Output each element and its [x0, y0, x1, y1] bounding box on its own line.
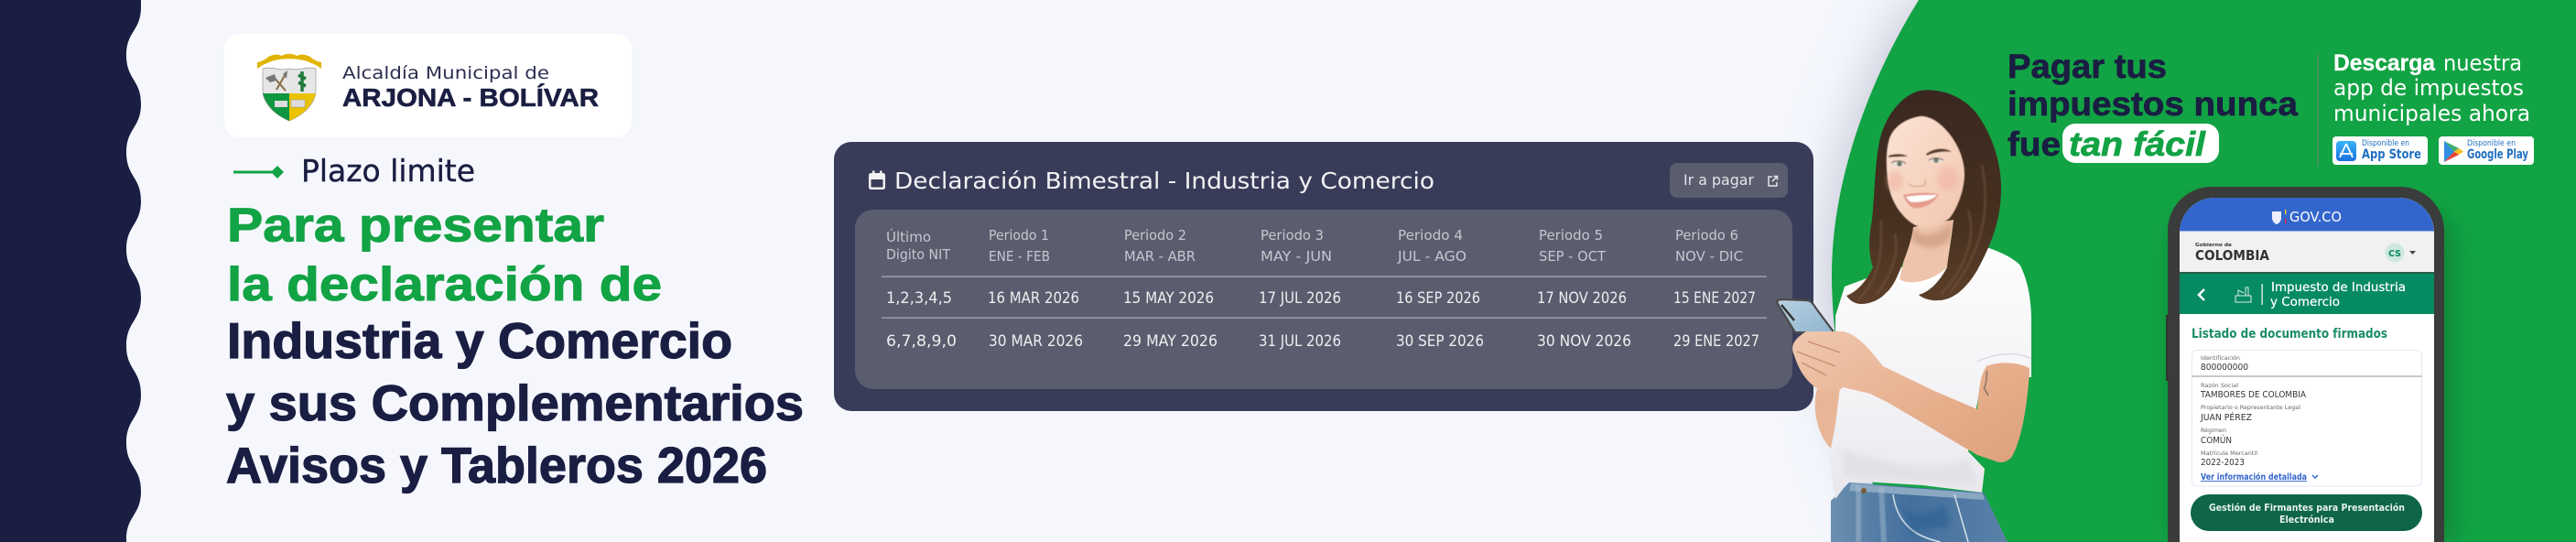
woman: hair — [1846, 90, 2001, 304]
table row 2: 6,7,8,9,0 — [886, 332, 957, 351]
phone data card: Razón Social — [2201, 382, 2238, 389]
phone title bar: impuesto de industria: Impuesto de Industria — [2271, 281, 2406, 295]
table row 2: 30 MAR 2026 — [989, 332, 1083, 351]
table row 1: 15 ENE 2027 — [1673, 289, 1756, 308]
phone title bar: impuesto de industria: y Comercio — [2270, 296, 2340, 309]
phone button: Gestión de Firmantes para Presentación — [2209, 502, 2405, 514]
table row 1: 16 SEP 2026 — [1396, 289, 1480, 308]
badge: google play — [2439, 136, 2534, 165]
icon: coat of arms shield — [257, 54, 321, 121]
download text: municipales ahora — [2333, 101, 2530, 126]
table row 1: 15 MAY 2026 — [1123, 289, 1214, 308]
phone subheader: gobierno de colombia — [2180, 232, 2434, 272]
logo card — [224, 34, 632, 137]
table header — [886, 227, 1743, 265]
woman holding a phone — [1777, 90, 2031, 542]
phone mockup — [2166, 187, 2455, 542]
download text: app de impuestos — [2333, 75, 2524, 101]
phone data card: Matrícula Mercantil — [2201, 450, 2257, 457]
table row 2: 30 SEP 2026 — [1396, 332, 1484, 351]
woman: arm and hand — [1792, 331, 2029, 462]
main headline: la declaración de — [227, 258, 662, 311]
table header: Periodo 3 — [1261, 227, 1324, 244]
badge: app store — [2332, 136, 2428, 165]
phone header: gov.co — [2180, 198, 2434, 233]
phone data card: TAMBORES DE COLOMBIA — [2200, 390, 2306, 400]
phone data card — [2192, 350, 2422, 486]
table header: SEP - OCT — [1539, 248, 1607, 265]
subheading: plazo limite: Plazo limite — [301, 153, 475, 189]
table: deadlines — [855, 210, 1792, 389]
table row 2: 29 MAY 2026 — [1123, 332, 1218, 351]
logo text: Alcaldía Municipal de — [342, 63, 549, 83]
phone data card: 2022-2023 — [2201, 458, 2245, 468]
woman: hair highlights — [1858, 165, 1986, 300]
table row 1: 16 MAR 2026 — [988, 289, 1079, 308]
green right background — [1832, 0, 2576, 542]
main headline: Para presentar — [227, 200, 604, 253]
phone data card: COMÚN — [2201, 435, 2232, 446]
slogan: pagar tus impuestos: fue — [2008, 125, 2061, 163]
table header: MAR - ABR — [1124, 248, 1196, 265]
table header: Periodo 1 — [989, 227, 1049, 244]
slogan: pagar tus impuestos: Pagar tus — [2008, 48, 2167, 85]
table header: Periodo 2 — [1124, 227, 1186, 244]
panel: declaración bimestral — [834, 142, 1813, 411]
table header: JUL - AGO — [1397, 248, 1467, 265]
table row 1: 17 NOV 2026 — [1537, 289, 1627, 308]
phone button: Electrónica — [2279, 514, 2334, 526]
table header: Último — [886, 228, 931, 245]
button: ir a pagar — [1670, 163, 1788, 198]
phone data card: Régimen — [2201, 427, 2226, 434]
woman: neck — [1900, 215, 1954, 289]
table row 1: 1,2,3,4,5 — [886, 289, 952, 308]
icon: calendar — [869, 170, 885, 190]
badge: google play: Disponible en — [2467, 139, 2516, 148]
phone header: gov.co: GOV.CO — [2289, 209, 2342, 225]
badge: app store: Disponible en — [2362, 139, 2409, 148]
woman: face — [1887, 116, 1964, 227]
table row 2 — [886, 332, 1759, 351]
table row 1 — [886, 289, 1756, 308]
woman: shirt — [1829, 247, 2031, 499]
phone data card: Propietario o Representante Legal — [2201, 404, 2300, 411]
woman: far forearm — [1815, 389, 1842, 449]
table row 2: 29 ENE 2027 — [1673, 332, 1759, 351]
main headline: y sus Complementarios — [226, 374, 804, 431]
logo text: ARJONA - BOLÍVAR — [342, 83, 599, 112]
table row 2: 31 JUL 2026 — [1259, 332, 1341, 351]
phone data card: 800000000 — [2201, 363, 2248, 373]
panel heading: Declaración Bimestral - Industria y Comercio — [894, 168, 1434, 194]
phone data card: Ver información detallada — [2201, 472, 2307, 482]
table header: ENE - FEB — [989, 248, 1050, 265]
button: ir a pagar: Ir a pagar — [1683, 171, 1754, 189]
table header: Periodo 6 — [1675, 227, 1738, 244]
phone data card: Identificación — [2201, 354, 2240, 362]
badge: google play: Google Play — [2467, 147, 2528, 162]
highlight pill: tan fácil: tan fácil — [2069, 125, 2206, 163]
slogan: pagar tus impuestos: impuestos nunca — [2008, 85, 2298, 123]
download text — [2333, 50, 2530, 126]
badge: app store: App Store — [2362, 147, 2421, 162]
phone subheader: gobierno de colombia: COLOMBIA — [2195, 247, 2269, 264]
phone button — [2191, 494, 2422, 531]
phone title bar: impuesto de industria — [2180, 272, 2434, 314]
woman: jeans — [1831, 482, 2008, 542]
table header: MAY - JUN — [1261, 248, 1332, 265]
download text: nuestra — [2443, 50, 2522, 76]
table row 1: 17 JUL 2026 — [1259, 289, 1341, 308]
main headline: Avisos y Tableros 2026 — [226, 437, 767, 493]
table header: Periodo 4 — [1398, 227, 1463, 244]
table header: Digito NIT — [886, 246, 951, 263]
wavy navy left band — [0, 0, 141, 542]
table header: NOV - DIC — [1675, 248, 1743, 265]
soft shadow of green shape — [1832, 0, 2014, 542]
slogan: pagar tus impuestos — [2008, 48, 2298, 163]
logo text — [342, 63, 599, 112]
table row 2: 30 NOV 2026 — [1537, 332, 1631, 351]
main headline: Industria y Comercio — [227, 312, 732, 369]
arrow: plazo limite — [233, 166, 284, 179]
phone section title: Listado de documento firmados — [2192, 327, 2387, 341]
table header: Periodo 5 — [1539, 227, 1603, 244]
phone subheader: gobierno de colombia: CS — [2388, 249, 2401, 259]
download text: Descarga — [2333, 50, 2436, 76]
woman: small phone — [1777, 299, 1835, 333]
phone data card: JUAN PÉREZ — [2200, 412, 2252, 423]
main headline — [226, 200, 804, 493]
phone subheader: gobierno de colombia: Gobierno de — [2195, 243, 2232, 248]
